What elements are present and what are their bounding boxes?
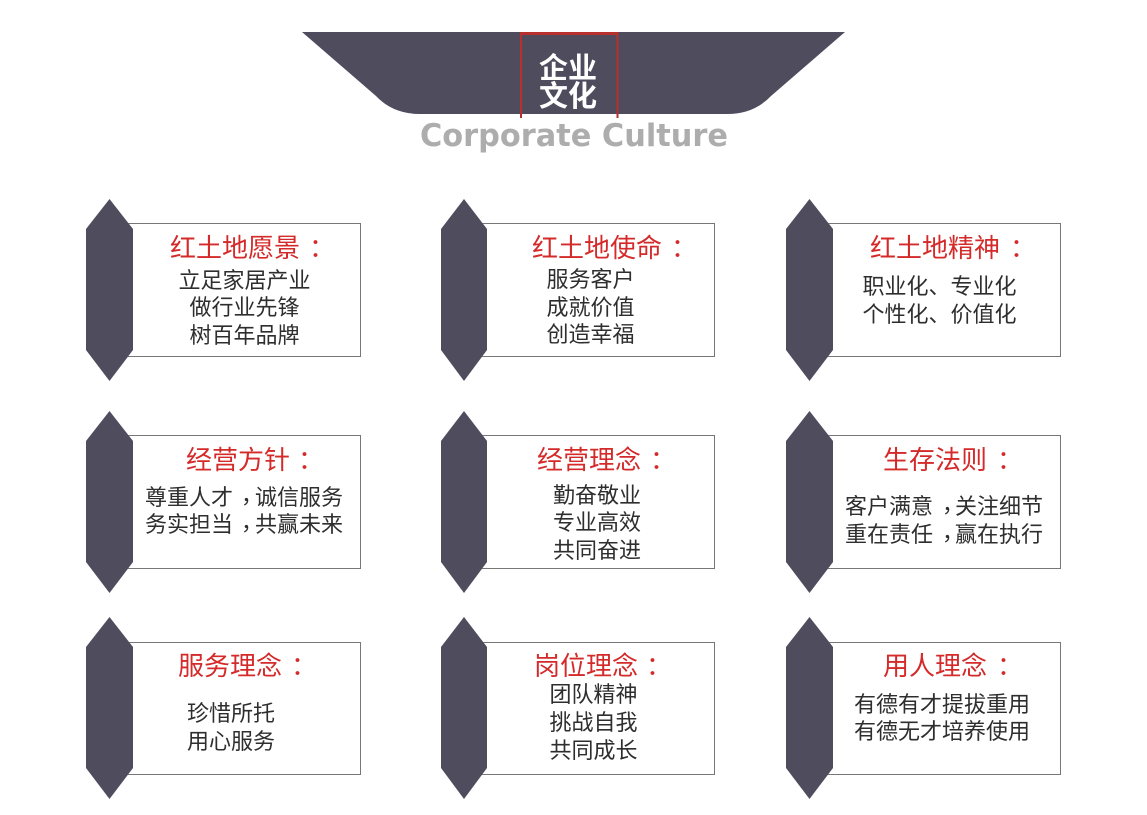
card: 经营方针: 经营方针 bbox=[186, 445, 290, 475]
card: 服务理念: 服务理念 bbox=[178, 651, 282, 681]
card: 生存法则: ， bbox=[942, 492, 964, 517]
card: 红土地使命: 创造幸福 bbox=[546, 322, 635, 347]
card: 红土地精神: 个性化、价值化 bbox=[862, 302, 1017, 327]
card: 经营方针: ： bbox=[298, 445, 324, 475]
card: 红土地愿景 bbox=[86, 199, 360, 381]
card: 红土地愿景: 做行业先锋 bbox=[189, 295, 300, 320]
card: 用人理念: 用人理念 bbox=[883, 651, 987, 681]
card: 生存法则: ， bbox=[942, 520, 964, 545]
card: 服务理念: 珍惜所托 bbox=[187, 701, 275, 726]
card: 红土地使命 bbox=[441, 199, 714, 381]
card: 岗位理念: 共同成长 bbox=[549, 738, 638, 763]
card: 经营理念 bbox=[441, 411, 714, 593]
card: 生存法则: 重在责任 bbox=[845, 522, 933, 547]
card: 生存法则 bbox=[786, 411, 1060, 593]
card: 经营方针: ， bbox=[241, 483, 263, 508]
card: 经营理念: 共同奋进 bbox=[553, 538, 641, 563]
card: 红土地精神: 职业化、专业化 bbox=[862, 274, 1017, 299]
card: 红土地使命: 服务客户 bbox=[546, 267, 635, 292]
subtitle: Corporate Culture: Corporate Culture bbox=[420, 118, 728, 154]
card: 岗位理念 bbox=[441, 617, 714, 799]
card: 生存法则: ： bbox=[997, 445, 1023, 475]
card: 岗位理念: 岗位理念 bbox=[534, 651, 638, 681]
card: 岗位理念: 团队精神 bbox=[549, 682, 638, 707]
card: 岗位理念: ： bbox=[646, 651, 672, 681]
card: 经营理念: 专业高效 bbox=[553, 510, 641, 535]
card: 经营理念: 勤奋敬业 bbox=[553, 483, 641, 508]
card: 经营理念: 经营理念 bbox=[537, 445, 641, 475]
card: 经营方针: 诚信服务 bbox=[255, 485, 343, 510]
card: 红土地愿景: 红土地愿景 bbox=[170, 233, 300, 263]
card: 用人理念: 有德无才培养使用 bbox=[854, 719, 1030, 744]
card: 红土地使命: 红土地使命 bbox=[532, 233, 662, 263]
card: 生存法则: 客户满意 bbox=[845, 494, 933, 519]
card: 经营方针: 尊重人才 bbox=[145, 485, 233, 510]
card: 红土地使命: ： bbox=[671, 233, 697, 263]
card: 经营理念: ： bbox=[650, 445, 676, 475]
card: 服务理念 bbox=[86, 617, 360, 799]
card: 用人理念: 有德有才提拔重用 bbox=[854, 692, 1030, 717]
header banner bbox=[302, 32, 845, 118]
card: 经营方针: ， bbox=[241, 510, 263, 535]
card: 红土地使命: 成就价值 bbox=[546, 295, 635, 320]
card: 红土地精神: ： bbox=[1010, 233, 1036, 263]
card: 服务理念: 用心服务 bbox=[187, 729, 275, 754]
card: 红土地精神 bbox=[786, 199, 1060, 381]
card: 经营方针: 共赢未来 bbox=[255, 512, 343, 537]
card: 经营方针: 务实担当 bbox=[145, 512, 233, 537]
card: 红土地精神: 红土地精神 bbox=[870, 233, 1000, 263]
card: 红土地愿景: 立足家居产业 bbox=[178, 268, 311, 293]
header banner: 企业 bbox=[539, 52, 597, 85]
card: 生存法则: 生存法则 bbox=[883, 445, 987, 475]
card: 岗位理念: 挑战自我 bbox=[549, 710, 638, 735]
card: 经营方针 bbox=[86, 411, 360, 593]
card: 生存法则: 关注细节 bbox=[955, 494, 1043, 519]
card: 红土地愿景: ： bbox=[309, 233, 335, 263]
card: 服务理念: ： bbox=[291, 651, 317, 681]
card: 生存法则: 赢在执行 bbox=[955, 522, 1043, 547]
card: 用人理念 bbox=[786, 617, 1060, 799]
card: 红土地愿景: 树百年品牌 bbox=[189, 323, 300, 348]
card: 用人理念: ： bbox=[997, 651, 1023, 681]
header banner: 文化 bbox=[539, 80, 597, 113]
